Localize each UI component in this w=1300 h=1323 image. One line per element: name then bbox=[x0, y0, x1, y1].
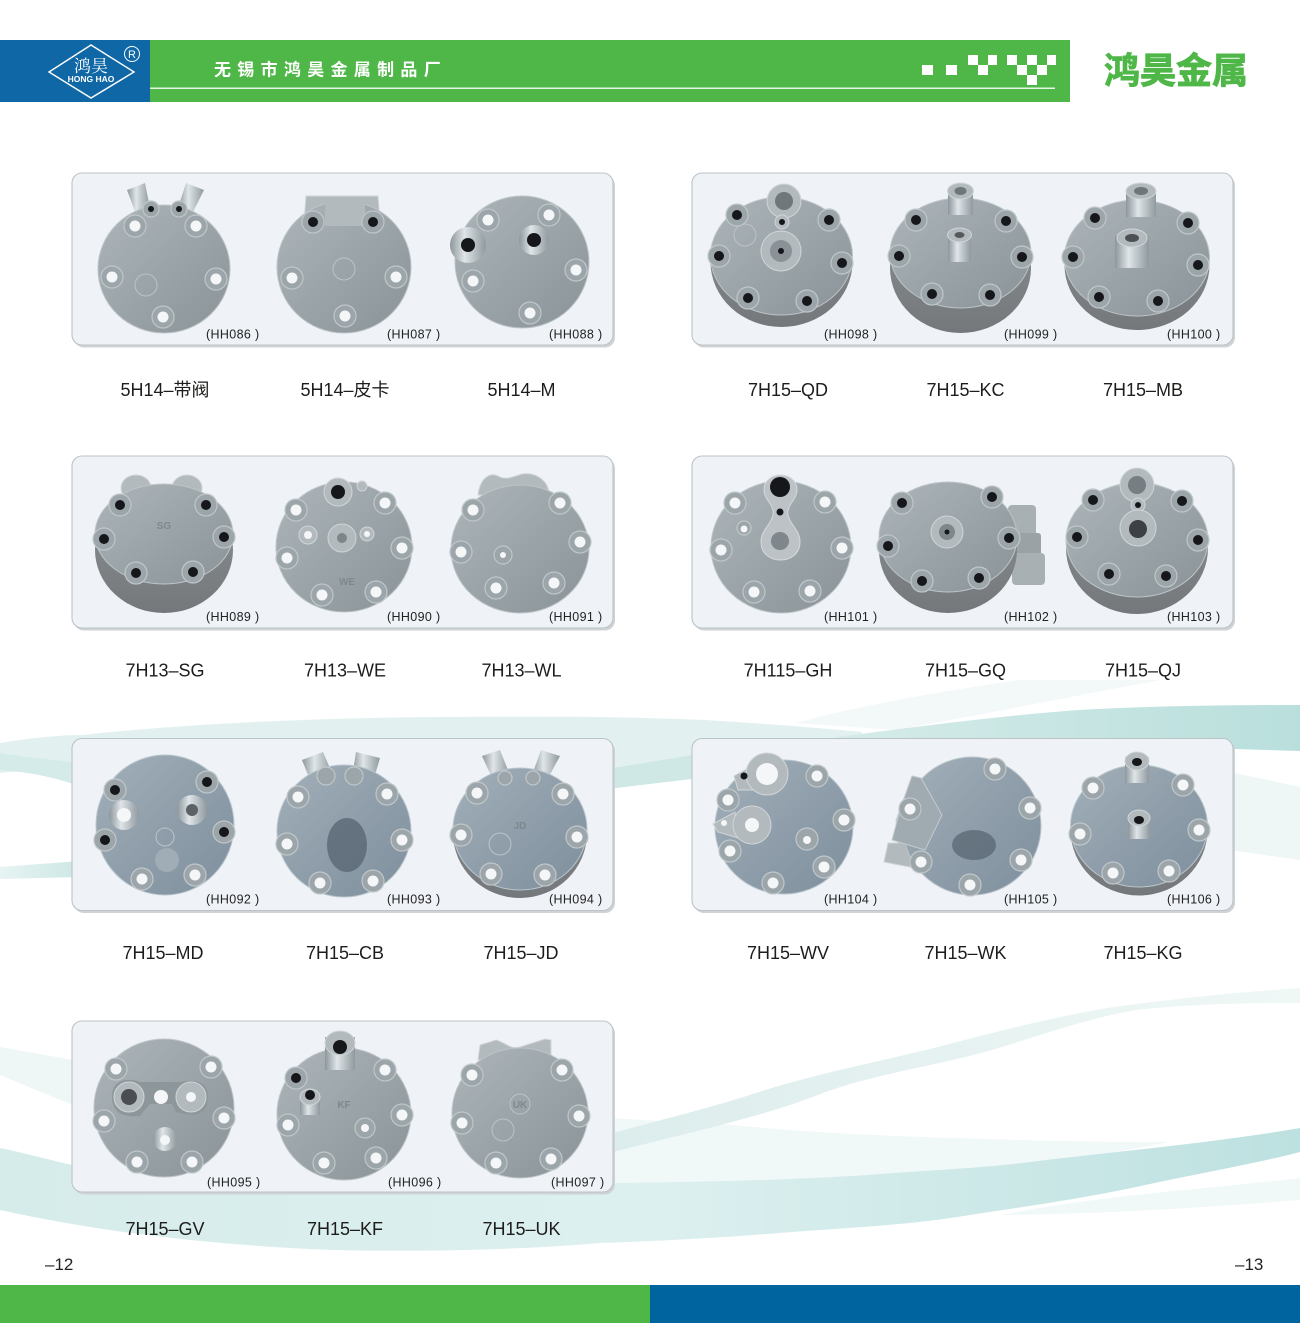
part: HH104 bbox=[713, 753, 855, 894]
name: 7H13-WE: 7H13–WE bbox=[304, 660, 386, 680]
part: HH098 bbox=[708, 184, 853, 327]
label: HH098: (HH098 ) bbox=[824, 328, 878, 342]
part: HH090: WE bbox=[339, 577, 355, 588]
company name: 无锡市鸿昊金属制品厂 bbox=[214, 60, 447, 80]
part: HH095 bbox=[93, 1039, 235, 1177]
label: HH101: (HH101 ) bbox=[824, 610, 878, 624]
part: HH097 bbox=[451, 1039, 590, 1178]
part: HH101 bbox=[710, 475, 853, 613]
label: HH091: (HH091 ) bbox=[549, 610, 603, 624]
part: HH091 bbox=[450, 474, 591, 613]
part: HH106 bbox=[1069, 752, 1210, 896]
label: HH104: (HH104 ) bbox=[824, 892, 878, 906]
part: HH096 bbox=[277, 1031, 413, 1180]
part: HH086 bbox=[98, 183, 230, 333]
name: 7H115-GH: 7H115–GH bbox=[744, 660, 832, 680]
label: HH087: (HH087 ) bbox=[387, 328, 441, 342]
label: HH103: (HH103 ) bbox=[1167, 610, 1221, 624]
name: 7H15-GQ: 7H15–GQ bbox=[925, 660, 1006, 680]
label: HH090: (HH090 ) bbox=[387, 610, 441, 624]
part: HH105 bbox=[884, 757, 1041, 896]
part: HH102 bbox=[877, 482, 1045, 613]
part: HH093 bbox=[276, 752, 413, 897]
name: 7H15-QD: 7H15–QD bbox=[748, 380, 828, 400]
part: HH096: KF bbox=[337, 1100, 351, 1111]
name: 7H15-QJ: 7H15–QJ bbox=[1105, 660, 1181, 680]
name: 7H15-KG: 7H15–KG bbox=[1103, 943, 1183, 963]
icon: diamond logo: 鸿昊 bbox=[74, 57, 108, 76]
model names row 3 bbox=[122, 943, 1183, 963]
name: 7H15-MD: 7H15–MD bbox=[122, 943, 204, 963]
label: HH095: (HH095 ) bbox=[207, 1176, 261, 1190]
panel: HH095-097 bbox=[72, 1021, 615, 1194]
name: 7H15-UK: 7H15–UK bbox=[482, 1219, 561, 1239]
icon: registered mark bbox=[124, 46, 140, 62]
icon: diamond logo: HONG HAO bbox=[68, 74, 115, 84]
part: HH094 bbox=[450, 750, 588, 898]
label: HH105: (HH105 ) bbox=[1004, 892, 1058, 906]
panel: HH089-091 bbox=[72, 456, 615, 630]
label: HH102: (HH102 ) bbox=[1004, 610, 1058, 624]
panel: HH092-094 bbox=[72, 738, 615, 913]
model names row 4 bbox=[125, 1219, 561, 1239]
panel: HH101-103 bbox=[692, 456, 1235, 630]
icon: diamond logo bbox=[49, 45, 134, 98]
name: 7H15-MB: 7H15–MB bbox=[1103, 380, 1183, 400]
name: 7H15-WK: 7H15–WK bbox=[924, 943, 1007, 963]
panel: HH104-106 bbox=[692, 738, 1235, 913]
label: HH100: (HH100 ) bbox=[1167, 328, 1221, 342]
name: 7H15-JD: 7H15–JD bbox=[483, 943, 559, 963]
part: HH103 bbox=[1066, 468, 1209, 614]
label: HH094: (HH094 ) bbox=[549, 892, 603, 906]
part: HH094: JD bbox=[514, 821, 526, 832]
icon: registered mark: R bbox=[128, 49, 136, 61]
header banner bbox=[0, 40, 1248, 102]
part: HH097: UK bbox=[513, 1100, 528, 1111]
background waves bbox=[0, 680, 1300, 1251]
panel: HH098-100 bbox=[692, 173, 1235, 348]
model names row 2 bbox=[125, 660, 1181, 680]
footer band bbox=[0, 1285, 1300, 1323]
label: HH097: (HH097 ) bbox=[551, 1176, 605, 1190]
page number right: –13 bbox=[1235, 1255, 1263, 1274]
name: 7H13-SG: 7H13–SG bbox=[125, 660, 205, 680]
name: 7H15-KF: 7H15–KF bbox=[307, 1219, 383, 1239]
label: HH096: (HH096 ) bbox=[388, 1176, 442, 1190]
part: HH090 bbox=[276, 478, 413, 612]
name: 5H14 with valve: 5H14–带阀 bbox=[120, 380, 210, 400]
header: blue logo block bbox=[0, 40, 150, 102]
label: HH099: (HH099 ) bbox=[1004, 328, 1058, 342]
name: 5H14 pika: 5H14–皮卡 bbox=[300, 380, 390, 400]
name: 7H15-GV: 7H15–GV bbox=[125, 1219, 205, 1239]
name: 7H13-WL: 7H13–WL bbox=[481, 660, 562, 680]
part: HH099 bbox=[888, 183, 1033, 333]
brand wordmark: 鸿昊金属 bbox=[1104, 50, 1248, 91]
checker pattern bbox=[922, 55, 1056, 85]
name: 7H15-CB: 7H15–CB bbox=[306, 943, 384, 963]
part: HH100 bbox=[1062, 183, 1210, 330]
name: 5H14-M: 5H14–M bbox=[487, 380, 556, 400]
part: HH089: SG bbox=[157, 521, 171, 532]
label: HH106: (HH106 ) bbox=[1167, 892, 1221, 906]
label: HH092: (HH092 ) bbox=[206, 892, 260, 906]
model names row 1 bbox=[120, 380, 1183, 400]
label: HH089: (HH089 ) bbox=[206, 610, 260, 624]
label: HH088: (HH088 ) bbox=[549, 328, 603, 342]
header: green bar bbox=[150, 40, 1070, 102]
part: HH089 bbox=[93, 475, 235, 613]
label: HH086: (HH086 ) bbox=[206, 328, 260, 342]
part: HH087 bbox=[277, 196, 411, 333]
name: 7H15-KC: 7H15–KC bbox=[926, 380, 1005, 400]
name: 7H15-WV: 7H15–WV bbox=[747, 943, 829, 963]
label: HH093: (HH093 ) bbox=[387, 892, 441, 906]
part: HH088 bbox=[450, 196, 589, 328]
panel: HH086-088 bbox=[72, 173, 615, 348]
part: HH092 bbox=[94, 755, 235, 895]
page number left: –12 bbox=[45, 1255, 73, 1274]
